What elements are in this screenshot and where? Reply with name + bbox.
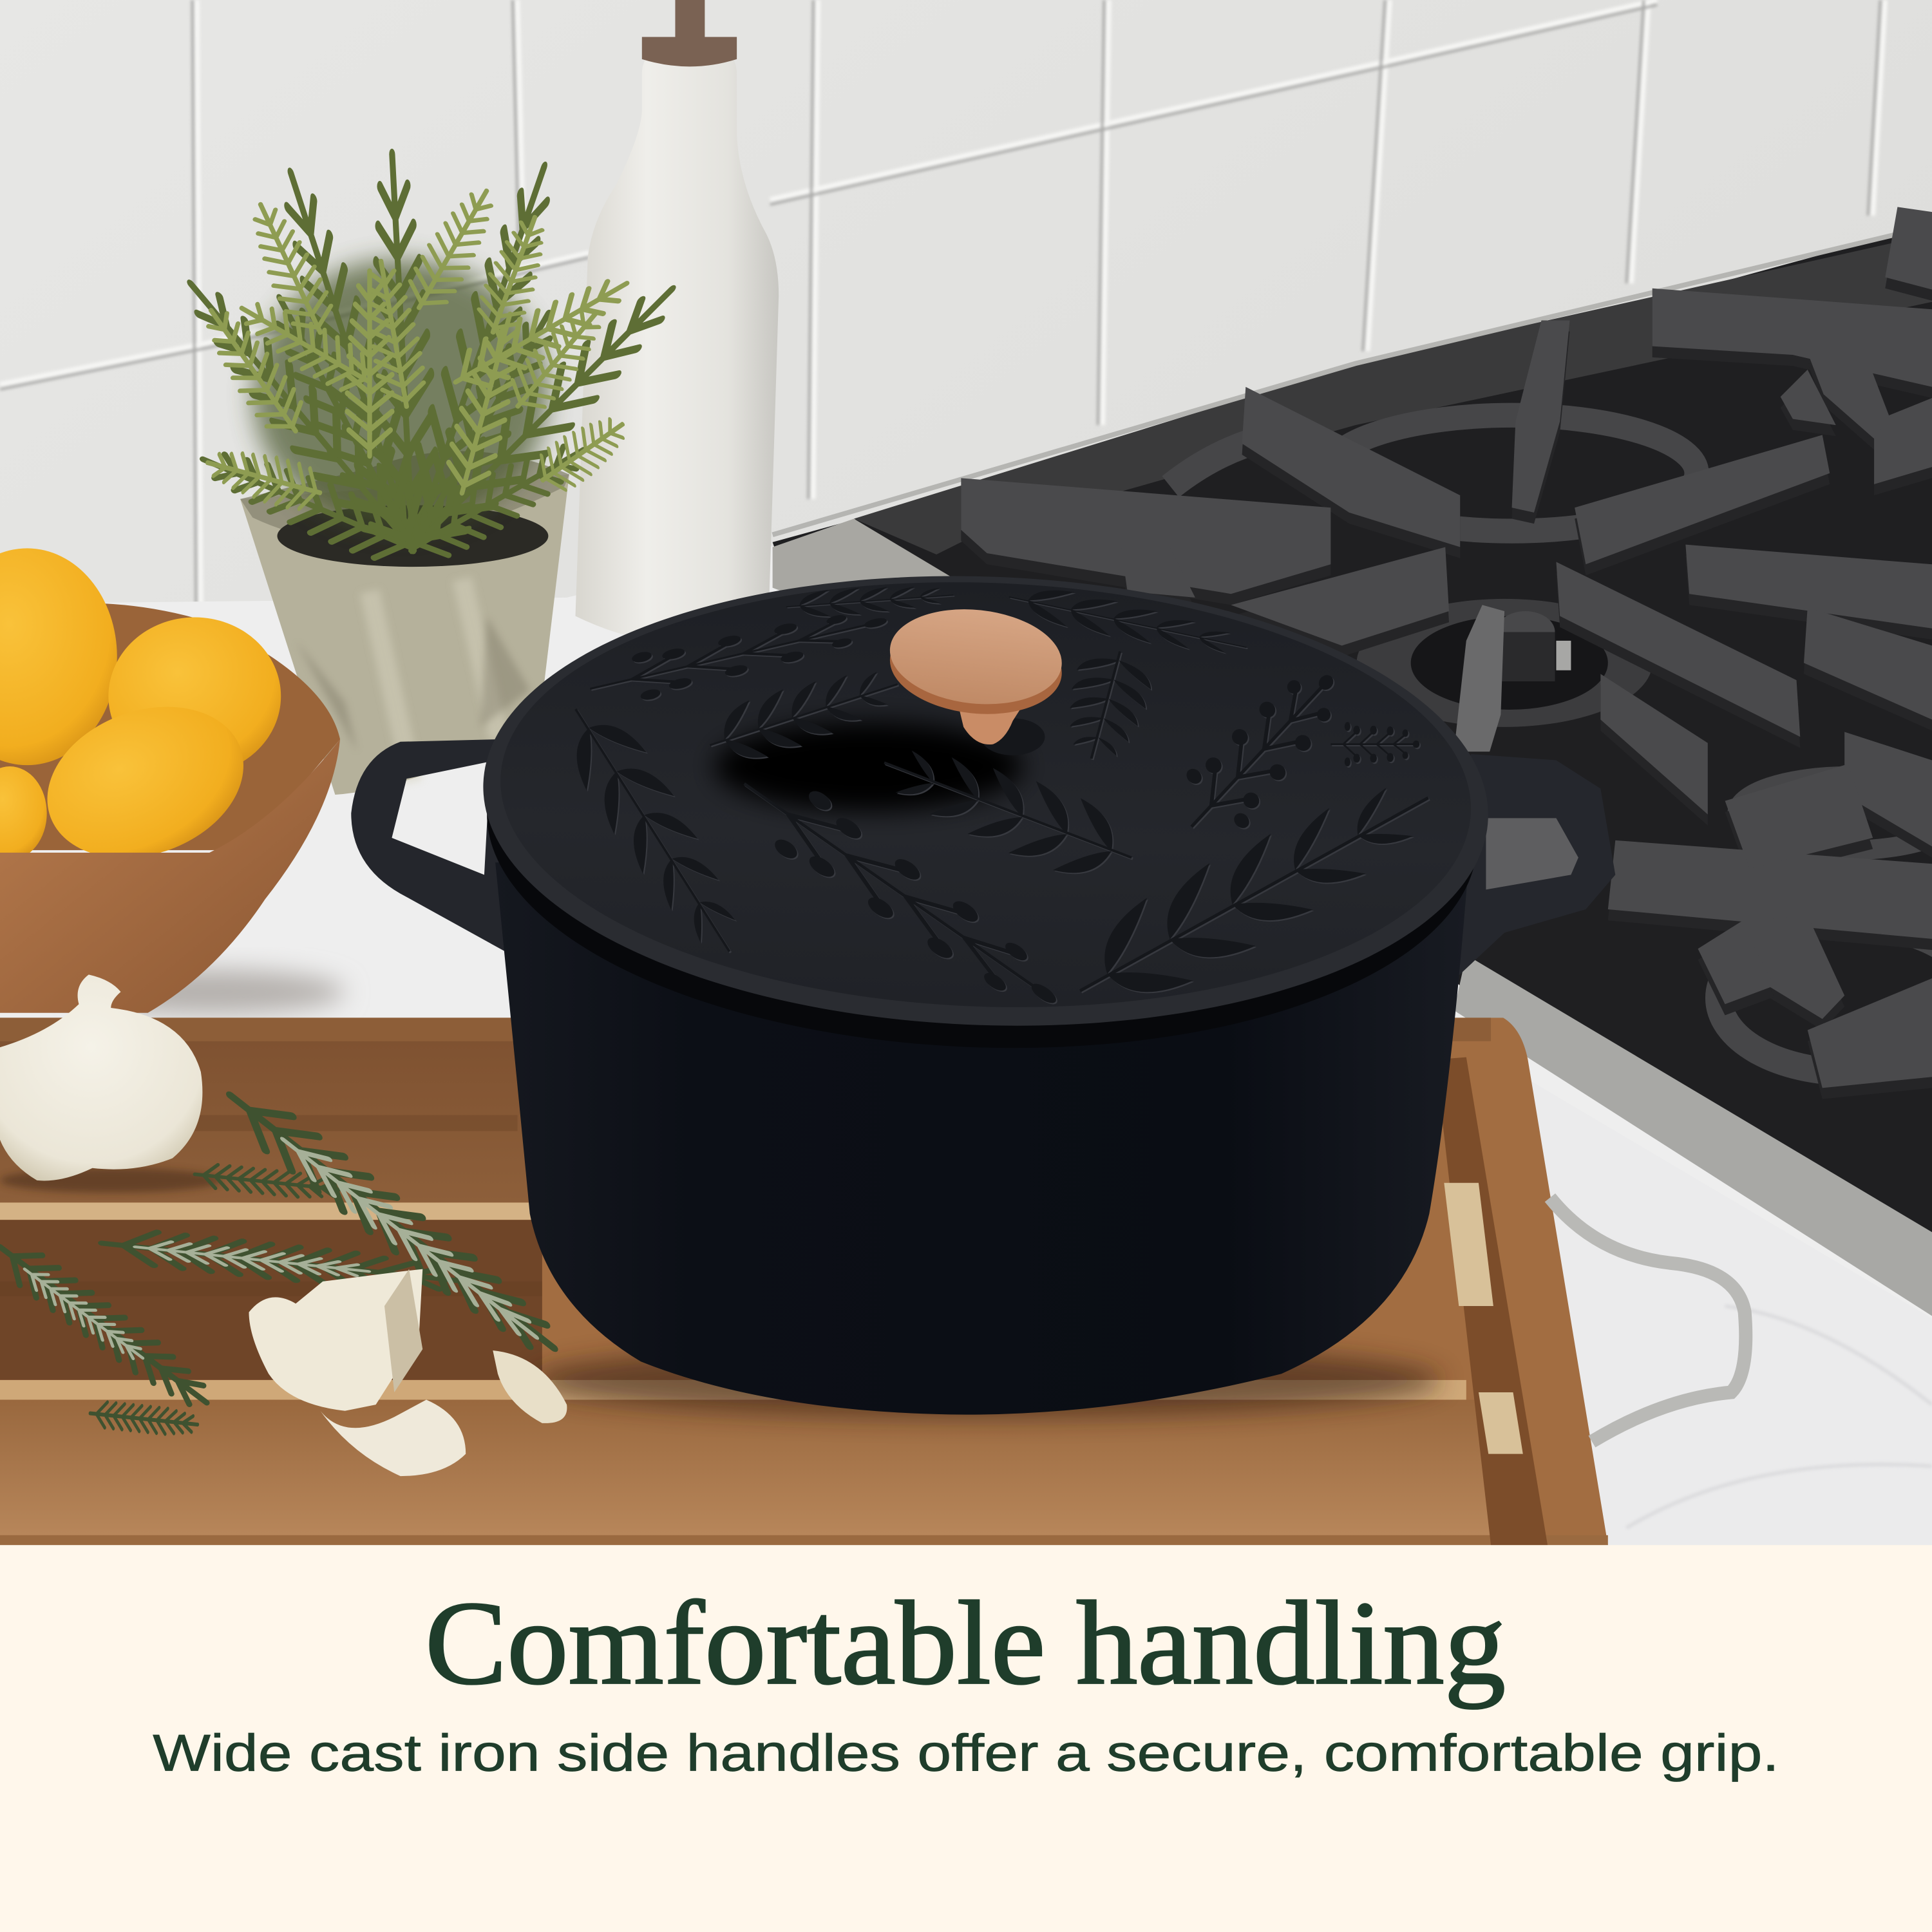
back trim strip (854, 234, 1932, 554)
metal pot (240, 475, 569, 795)
lid (475, 559, 1496, 1043)
juice groove (1435, 1057, 1548, 1545)
right handle opening (1486, 818, 1578, 889)
embossed herbs: highlights (548, 580, 1452, 1033)
bowl exterior (0, 739, 340, 1013)
background: tiled wall (0, 0, 1932, 1545)
caption banner (0, 1545, 1932, 1932)
garlic bulb (0, 974, 202, 1180)
stainless front rail (1454, 955, 1932, 1316)
bowl shadow (74, 970, 345, 1014)
dutch oven (351, 559, 1615, 1417)
center burner (1357, 599, 1653, 727)
knob shadow (715, 722, 1023, 811)
right handle (1429, 754, 1615, 986)
wood bands (0, 1018, 1491, 1041)
bottle (575, 0, 779, 642)
silver back edge (773, 234, 1897, 535)
lemons (0, 548, 281, 884)
copper pump (642, 0, 737, 66)
stainless corner (773, 518, 955, 641)
wooden bowl with lemons (0, 548, 345, 1014)
gas stove (773, 207, 1932, 1316)
cast iron grates (961, 207, 1932, 1099)
countertop: white marble (0, 234, 1932, 1545)
cast shadow (530, 1343, 1442, 1417)
embossed herbs: shaded (547, 579, 1450, 1032)
lid underside rim (479, 592, 1484, 1065)
pot body (495, 862, 1469, 1415)
sprigs (170, 153, 691, 572)
heading: Comfortable handling (425, 1578, 1506, 1710)
subheading: Wide cast iron side handles offer a secure, comfortable grip. (153, 1724, 1779, 1782)
cutting board (0, 1018, 1746, 1545)
garlic cloves (249, 1269, 422, 1411)
rosemary sprigs (0, 1078, 567, 1437)
stove top surface (773, 224, 1932, 1306)
copper knob (886, 601, 1066, 755)
burner rings and arches (1171, 415, 1932, 1072)
garlic and rosemary on the board (0, 974, 567, 1476)
potted rosemary plant (170, 153, 691, 795)
left handle (351, 739, 542, 955)
foliage mass (252, 259, 548, 530)
grate spike (1454, 605, 1504, 752)
board metal handle (1550, 1198, 1746, 1442)
bowl inside (0, 603, 340, 850)
board shadows (0, 1168, 222, 1193)
